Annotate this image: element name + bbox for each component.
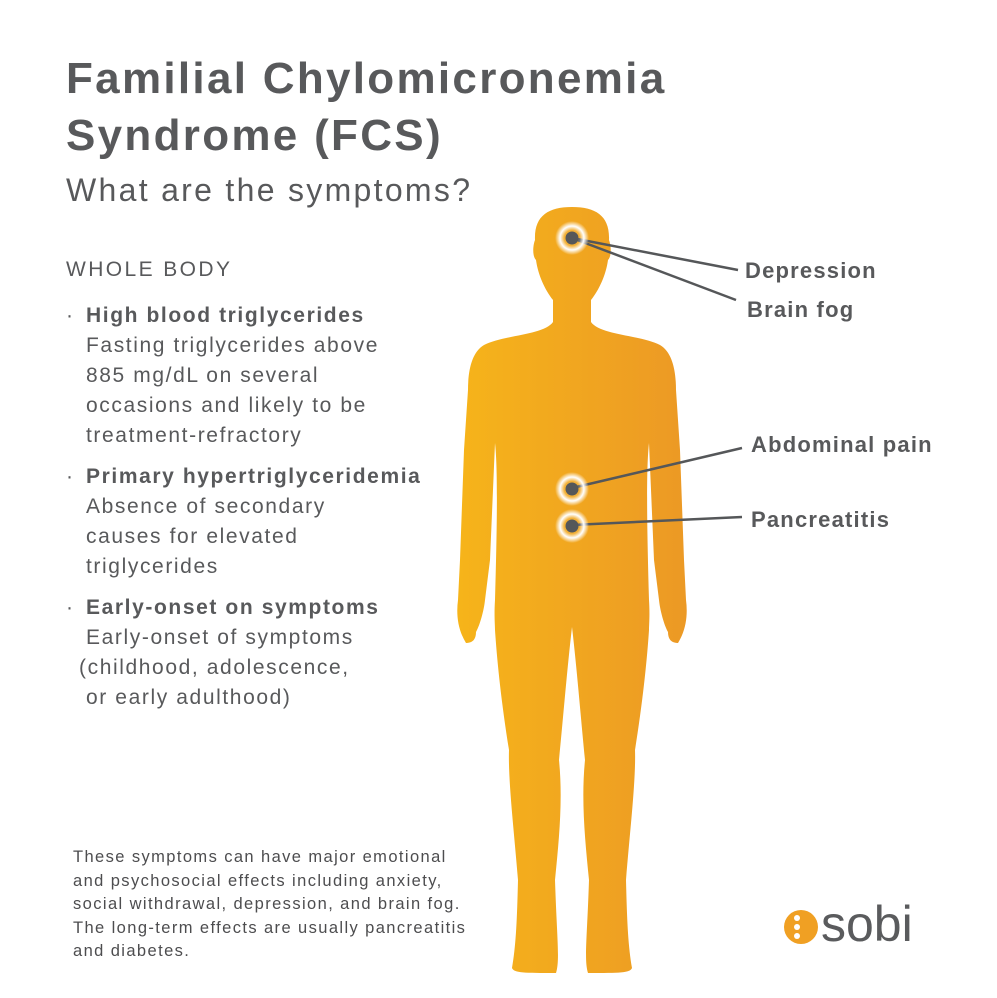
symptom item: early onset bbox=[66, 596, 380, 709]
marker: abdomen bbox=[555, 472, 589, 506]
marker: head bbox=[555, 221, 589, 255]
footnote text: social withdrawal, depression, and brain fog. bbox=[73, 895, 461, 913]
marker: pancreas bbox=[555, 509, 589, 543]
symptom item: high blood triglycerides: High blood triglycerides bbox=[86, 304, 365, 327]
symptom item: high blood triglycerides: occasions and likely to be bbox=[86, 394, 367, 417]
symptom item: high blood triglycerides: Fasting triglycerides above bbox=[86, 334, 379, 357]
symptom item: early onset: (childhood, adolescence, bbox=[79, 656, 350, 679]
footnote text bbox=[73, 848, 466, 960]
symptom item: early onset: Early-onset on symptoms bbox=[86, 596, 380, 619]
footnote text: The long-term effects are usually pancreatitis bbox=[73, 918, 466, 936]
title: Familial Chylomicronemia bbox=[66, 54, 666, 103]
title bbox=[66, 54, 666, 160]
footnote text: and diabetes. bbox=[73, 942, 190, 960]
symptom item: high blood triglycerides: 885 mg/dL on several bbox=[86, 364, 319, 387]
label: pancreatitis: Pancreatitis bbox=[751, 507, 890, 532]
label: brain fog: Brain fog bbox=[747, 297, 854, 322]
silhouette bbox=[457, 207, 687, 973]
subtitle: What are the symptoms? bbox=[66, 172, 472, 208]
symptom item: early onset: · bbox=[66, 596, 75, 619]
symptom item: primary hypertriglyceridemia: triglycerides bbox=[86, 555, 219, 578]
heading: whole body: WHOLE BODY bbox=[66, 258, 232, 281]
label: abdominal pain: Abdominal pain bbox=[751, 432, 933, 457]
symptom item: primary hypertriglyceridemia: · bbox=[66, 465, 75, 488]
label: depression: Depression bbox=[745, 258, 877, 283]
symptom item: primary hypertriglyceridemia: Primary hypertriglyceridemia bbox=[86, 465, 421, 488]
symptom item: primary hypertriglyceridemia: causes for elevated bbox=[86, 525, 299, 548]
footnote text: These symptoms can have major emotional bbox=[73, 848, 447, 866]
symptom item: primary hypertriglyceridemia bbox=[66, 465, 421, 578]
symptom item: early onset: or early adulthood) bbox=[86, 686, 292, 709]
symptom item: high blood triglycerides: treatment-refractory bbox=[86, 424, 302, 447]
title: Syndrome (FCS) bbox=[66, 111, 443, 160]
symptom item: high blood triglycerides: · bbox=[66, 304, 75, 327]
footnote text: and psychosocial effects including anxiety, bbox=[73, 872, 443, 890]
symptom item: early onset: Early-onset of symptoms bbox=[86, 626, 354, 649]
logo: sobi: sobi bbox=[821, 896, 913, 952]
symptom item: high blood triglycerides bbox=[66, 304, 379, 447]
symptom item: primary hypertriglyceridemia: Absence of secondary bbox=[86, 495, 326, 518]
leader lines bbox=[572, 238, 742, 525]
